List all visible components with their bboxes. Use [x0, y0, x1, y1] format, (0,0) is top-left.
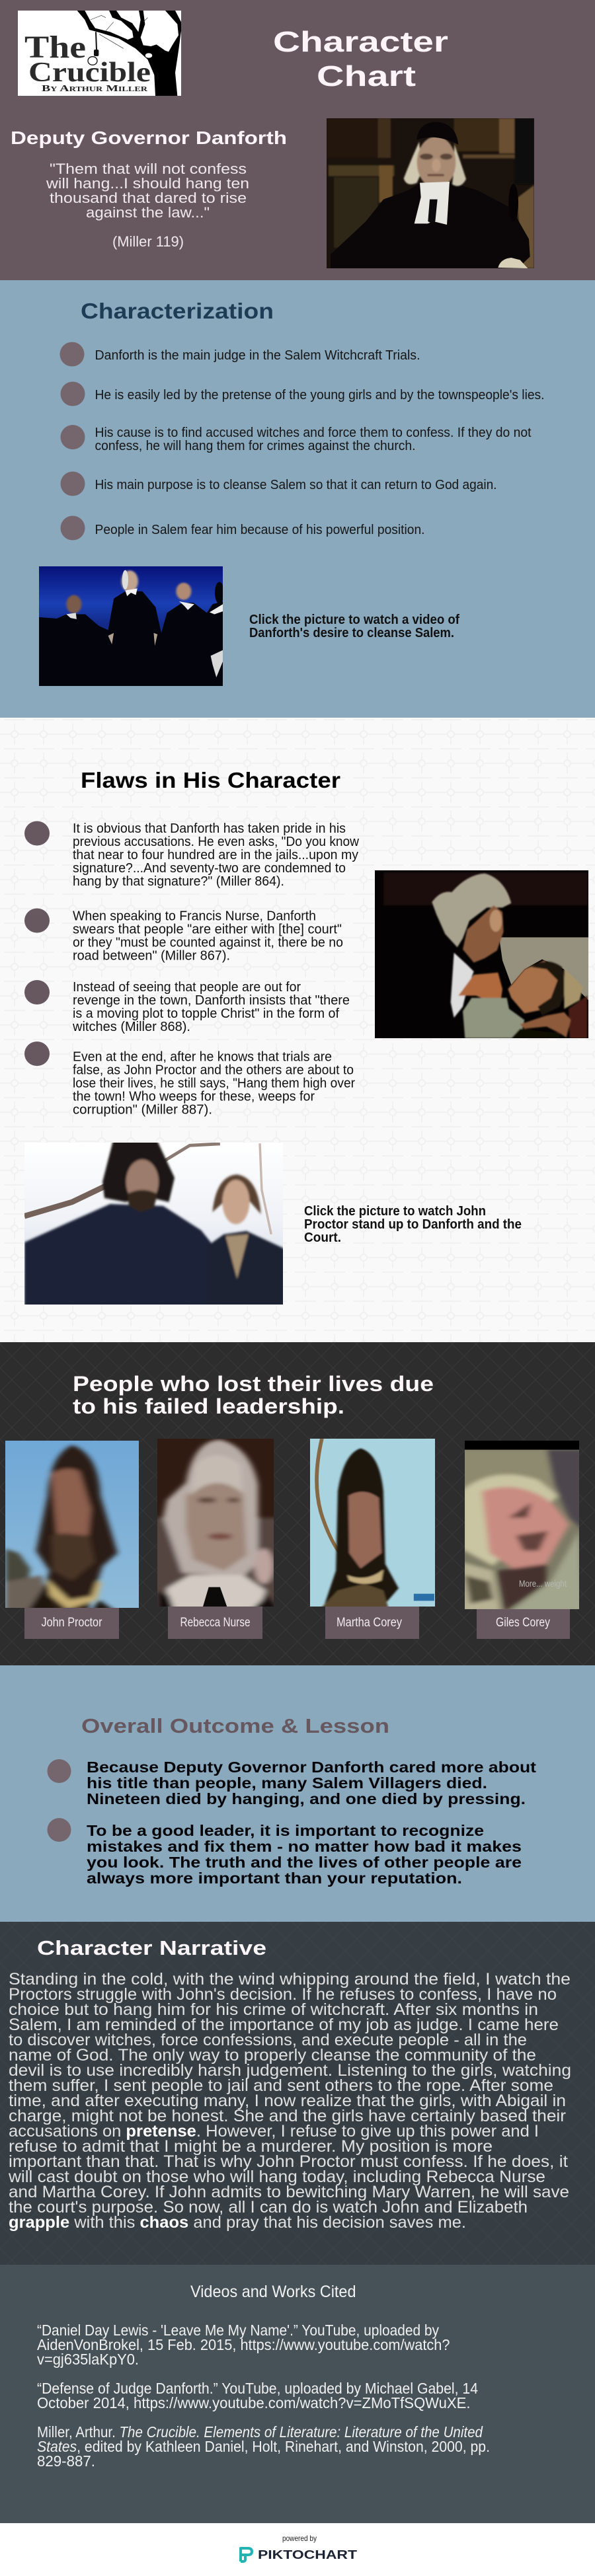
logo: The Crucible by Arthur Miller — [18, 11, 181, 96]
bullet 2: He is easily led by the pretense of the young girls and by the townspeople's lies. — [95, 388, 545, 402]
flaw 3: witches (Miller 868). — [72, 1020, 190, 1034]
flaw 4: corruption" (Miller 887). — [73, 1102, 212, 1117]
portrait: Giles Corey: More... weight — [519, 1578, 567, 1589]
panel: videos and works cited — [0, 2265, 595, 2523]
narrative text: Salem, I am reminded of the importance of my job as judge. I came here — [9, 2016, 559, 2034]
portrait: Giles Corey — [461, 1441, 584, 1611]
lesson 2: To be a good leader, it is important to recognize — [87, 1822, 484, 1839]
callout: video link: Danforth's desire to cleanse Salem. — [249, 626, 454, 640]
citation 2 — [37, 2380, 478, 2411]
quote: will hang...I should hang ten — [46, 175, 249, 192]
heading: Flaws in His Character: Flaws in His Character — [81, 768, 340, 792]
lesson 1: Because Deputy Governor Danforth cared more about — [87, 1759, 536, 1776]
citation 1 — [37, 2322, 450, 2368]
narrative text: important than that. That is why John Proctor must confess. If he does, it — [9, 2152, 568, 2171]
flaw 4: Even at the end, after he knows that trials are — [73, 1049, 332, 1064]
narrative text — [8, 1970, 571, 2232]
footer: powered by Piktochart: PIKTOCHART — [258, 2548, 357, 2561]
citation 3: Miller, Arthur. The Crucible. Elements of Literature: Literature of the United — [37, 2423, 483, 2441]
bullet 4 — [61, 472, 497, 496]
citation 1: “Daniel Day Lewis - 'Leave Me My Name'.” YouTube, uploaded by — [37, 2322, 439, 2339]
panel: character narrative — [0, 1922, 595, 2265]
quote: (Miller 119) — [112, 233, 184, 250]
citation 1: v=gj635laKpY0. — [37, 2351, 139, 2368]
portrait: Rebecca Nurse — [151, 1439, 281, 1610]
narrative text: will cast doubt on those who will hang today, including Rebecca Nurse — [8, 2168, 545, 2186]
narrative text: them suffer, I sent people to jail and sent others to the rope. After some — [9, 2076, 553, 2095]
heading: Overall Outcome & Lesson: Overall Outcome & Lesson — [81, 1714, 389, 1737]
callout: video link: Click the picture to watch a video of — [249, 613, 459, 627]
narrative text: charge, might not be honest. She and the girls have certainly based their — [9, 2107, 566, 2125]
quote — [46, 161, 249, 250]
title: Character — [273, 26, 448, 58]
heading: to his failed leadership. — [73, 1394, 344, 1418]
heading: Videos and Works Cited: Videos and Works Cited — [190, 2283, 356, 2301]
logo: The Crucible by Arthur Miller: Crucible — [28, 57, 151, 88]
label: Rebecca Nurse: Rebecca Nurse — [180, 1616, 250, 1630]
label: Rebecca Nurse — [168, 1607, 262, 1639]
flaw 2 — [24, 908, 343, 964]
flaw 3: is a moving plot to topple Christ" in the form of — [73, 1006, 339, 1021]
callout: video link — [304, 1204, 522, 1245]
bullet 1: Danforth is the main judge in the Salem Witchcraft Trials. — [95, 348, 420, 363]
citation 2: “Defense of Judge Danforth.” YouTube, uploaded by Michael Gabel, 14 — [37, 2380, 478, 2397]
lesson 1 — [48, 1759, 536, 1807]
photo: John and Elizabeth Proctor — [24, 1143, 283, 1305]
bullet 3: His cause is to find accused witches and force them to confess. If they do not — [95, 426, 532, 440]
flaw 2: swears that people "are either with [the] court" — [73, 923, 342, 937]
bullet 4: His main purpose is to cleanse Salem so that it can return to God again. — [95, 478, 497, 492]
flaw 1: that near to four hundred are in the jails...upon my — [73, 848, 358, 862]
lesson 1: his title than people, many Salem Villagers died. — [87, 1774, 487, 1792]
narrative text: time, and after executing many, I now realize that the girls, with Abigail in — [9, 2092, 566, 2110]
narrative text: grapple with this chaos and pray that his decision saves me. — [9, 2213, 466, 2232]
logo: The Crucible by Arthur Miller: By Arthur Miller — [42, 84, 148, 94]
citation 3: 829-887. — [37, 2452, 95, 2470]
flaw 4: lose their lives, he still says, "Hang them high over — [73, 1076, 355, 1090]
footer: powered by Piktochart — [0, 2523, 595, 2576]
narrative text: Proctors struggle with John's decision. If he refuses to confess, I have no — [9, 1985, 557, 2004]
lesson 1: Nineteen died by hanging, and one died by pressing. — [87, 1790, 526, 1807]
heading — [73, 1372, 434, 1418]
flaw 1: It is obvious that Danforth has taken pride in his — [73, 821, 346, 836]
logo: The Crucible by Arthur Miller: The — [24, 30, 86, 65]
lesson 2: mistakes and fix them - no matter how bad it makes — [87, 1838, 522, 1855]
bullet 3 — [61, 425, 532, 453]
label: Giles Corey — [477, 1609, 570, 1639]
narrative text: the court's purpose. So now, all I can do is watch John and Elizabeth — [9, 2198, 528, 2216]
flaw 1 — [24, 821, 360, 889]
bullet 2 — [61, 382, 545, 406]
flaw 4: false, as John Proctor and the others are about to — [73, 1063, 354, 1077]
narrative text: Standing in the cold, with the wind whipping around the field, I watch the — [9, 1970, 571, 1989]
quote: thousand that dared to rise — [50, 190, 247, 206]
citation 3: States, edited by Kathleen Daniel, Holt, Rinehart, and Winston, 2000, pp. — [37, 2438, 490, 2455]
panel: characterization — [0, 280, 595, 718]
portrait: Martha Corey — [310, 1439, 435, 1610]
label: Martha Corey — [325, 1607, 419, 1639]
photo: judges against blue sky — [39, 566, 223, 686]
flaw 2: road between" (Miller 867). — [73, 949, 230, 964]
flaw 1: signature?...And seventy-two are condemned to — [73, 861, 346, 876]
quote: "Them that will not confess — [50, 161, 247, 177]
flaw 3 — [24, 980, 350, 1034]
lesson 2: always more important than your reputation. — [87, 1870, 462, 1887]
heading: Character Narrative: Character Narrative — [37, 1936, 266, 1959]
flaw 1: previous accusations. He even asks, "Do you know — [73, 835, 360, 849]
heading: Characterization: Characterization — [81, 299, 274, 323]
narrative text: accusations on pretense. However, I refuse to give up this power and I — [9, 2122, 539, 2140]
narrative text: devil is to use incredibly harsh judgement. Listening to the girls, watching — [9, 2061, 571, 2080]
citation 1: AidenVonBrokel, 15 Feb. 2015, https://www.youtube.com/watch? — [37, 2336, 450, 2353]
flaw 3: revenge in the town, Danforth insists that "there — [73, 993, 350, 1008]
callout: video link: Proctor stand up to Danforth and the — [304, 1217, 522, 1232]
panel: header — [0, 0, 595, 280]
photo: Danforth and Mary Warren — [375, 870, 588, 1038]
citation 3 — [37, 2423, 490, 2470]
flaw 1: hang by that signature?" (Miller 864). — [73, 874, 284, 889]
flaw 4 — [24, 1042, 355, 1117]
narrative text: name of God. The only way to properly cleanse the community of the — [9, 2046, 536, 2065]
photo: Danforth portrait — [327, 118, 534, 268]
flaw 4: the town! Who weeps for these, weeps for — [73, 1089, 315, 1104]
narrative text: refuse to admit that I might be a murderer. My position is more — [9, 2137, 493, 2156]
bullet 5: People in Salem fear him because of his powerful position. — [95, 523, 424, 537]
quote: against the law..." — [86, 204, 210, 221]
title — [273, 26, 448, 93]
callout: video link — [249, 613, 459, 640]
heading: People who lost their lives due — [73, 1372, 434, 1396]
callout: video link: Click the picture to watch John — [304, 1204, 486, 1219]
portrait: John Proctor — [5, 1441, 139, 1612]
narrative text: choice but to hang him for his crime of witchcraft. After six months in — [9, 2000, 538, 2019]
citation 2: October 2014, https://www.youtube.com/watch?v=ZMoTfSQWuXE. — [37, 2394, 471, 2411]
bullet 5 — [61, 515, 424, 541]
icon: Piktochart logo — [241, 2548, 252, 2561]
footer: powered by Piktochart: powered by — [282, 2534, 317, 2543]
label: John Proctor — [24, 1608, 119, 1639]
narrative text: and Martha Corey. If John admits to bewitching Mary Warren, he will save — [9, 2183, 569, 2201]
label: John Proctor: John Proctor — [41, 1616, 102, 1630]
flaw 3: Instead of seeing that people are out for — [73, 980, 301, 995]
flaw 2: When speaking to Francis Nurse, Danforth — [73, 909, 316, 924]
panel: people who lost their lives — [0, 1342, 595, 1665]
panel: overall outcome and lesson — [0, 1665, 595, 1922]
callout: video link: Court. — [304, 1231, 341, 1245]
bullet 3: confess, he will hang them for crimes against the church. — [95, 439, 415, 453]
label: Giles Corey: Giles Corey — [496, 1616, 550, 1630]
heading: Deputy Governor Danforth: Deputy Governor Danforth — [11, 128, 287, 148]
flaw 2: or they "must be counted against it, there be no — [73, 936, 343, 950]
panel: flaws in his character — [0, 718, 595, 1342]
bullet 1 — [60, 342, 420, 366]
label: Martha Corey: Martha Corey — [337, 1616, 402, 1630]
lesson 2 — [48, 1818, 522, 1887]
title: Chart — [317, 60, 416, 93]
narrative text: to discover witches, force confessions, and execute people - all in the — [9, 2031, 527, 2049]
lesson 2: you look. The truth and the lives of other people are — [87, 1854, 522, 1871]
